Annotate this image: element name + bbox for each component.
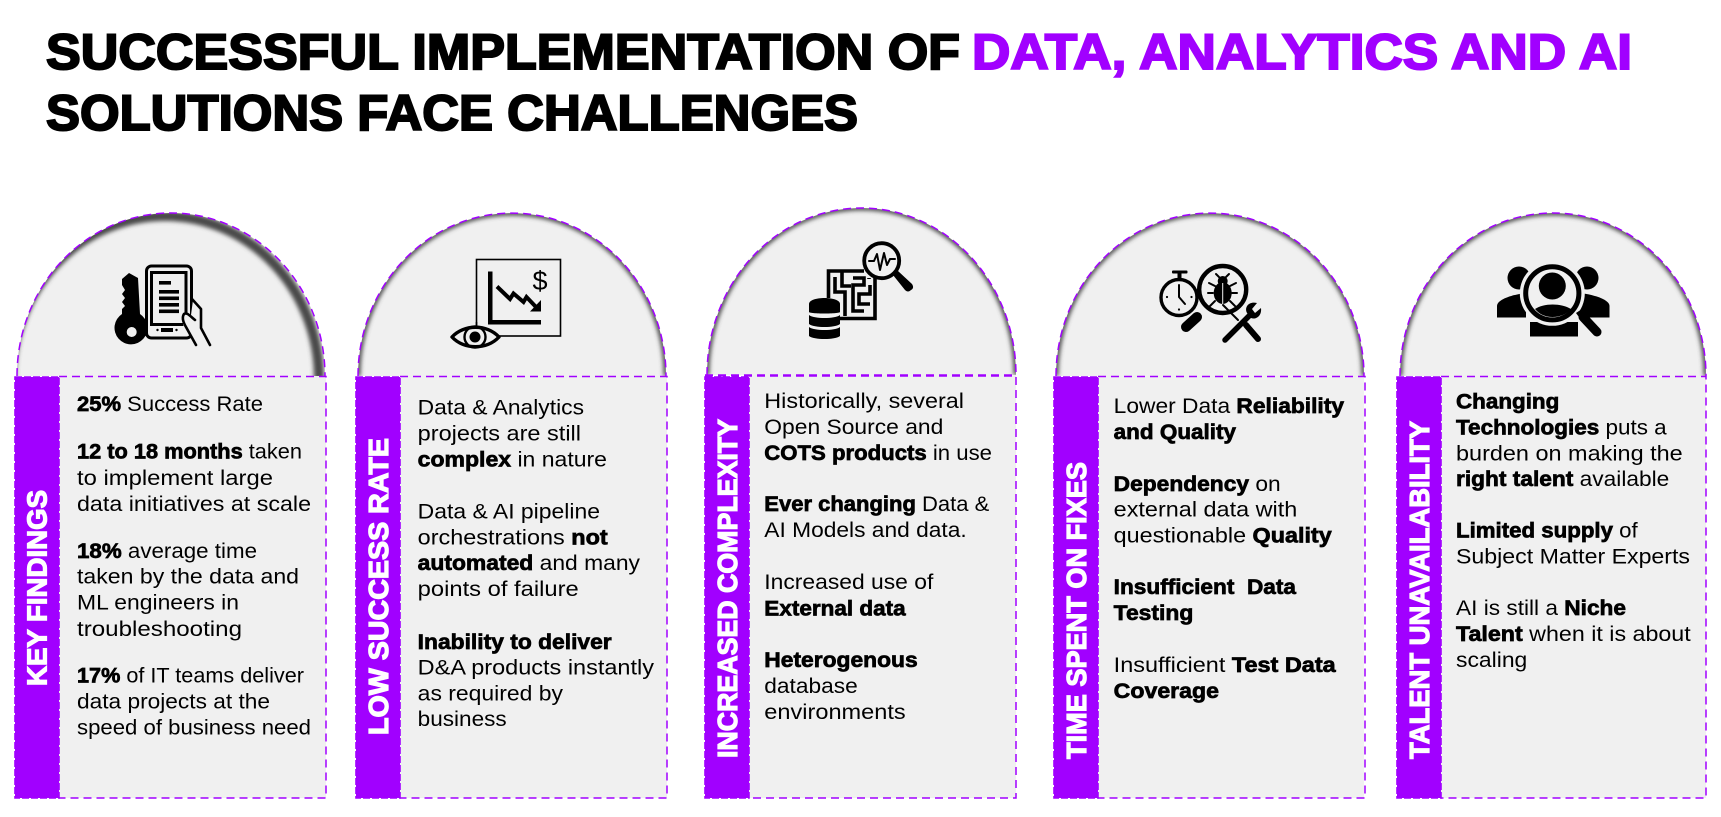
text: low success rate: points of failure bbox=[418, 577, 579, 601]
border: talent unavailability bbox=[1441, 376, 1706, 798]
border: low success rate bbox=[400, 376, 667, 798]
text: talent unavailability: right talent available bbox=[1456, 467, 1669, 491]
text: time spent on fixes: Insufficient Data bbox=[1114, 575, 1297, 599]
panel: key findings bbox=[11, 213, 326, 798]
text: increased complexity: Ever changing Data & bbox=[764, 492, 989, 516]
panel: talent unavailability bbox=[1397, 213, 1706, 798]
panel: time spent on fixes bbox=[1054, 213, 1365, 798]
dome: increased complexity bbox=[707, 208, 1016, 375]
side bar: increased complexity bbox=[705, 377, 749, 798]
text: key findings bbox=[77, 392, 311, 740]
text: increased complexity: Open Source and bbox=[764, 415, 943, 439]
side bar: increased complexity: INCREASED COMPLEXITY bbox=[712, 419, 743, 758]
text: increased complexity bbox=[764, 389, 992, 724]
text: increased complexity: Historically, several bbox=[764, 389, 964, 413]
text: key findings: troubleshooting bbox=[77, 617, 242, 641]
title: SUCCESSFUL IMPLEMENTATION OF bbox=[46, 24, 960, 80]
text: talent unavailability: Technologies puts a bbox=[1456, 416, 1667, 440]
text: time spent on fixes: questionable Quality bbox=[1114, 524, 1332, 548]
side bar: low success rate: LOW SUCCESS RATE bbox=[363, 438, 394, 735]
text: key findings: 17% of IT teams deliver bbox=[77, 664, 304, 688]
text: key findings: to implement large bbox=[77, 466, 273, 490]
border: key findings bbox=[59, 376, 326, 798]
dome: low success rate bbox=[358, 213, 666, 376]
dome: talent unavailability bbox=[1400, 213, 1706, 376]
panel: low success rate bbox=[356, 213, 667, 798]
text: talent unavailability: AI is still a Niche bbox=[1456, 596, 1626, 620]
text: time spent on fixes: Testing bbox=[1114, 601, 1193, 625]
text: low success rate: Data & Analytics bbox=[418, 396, 584, 420]
side bar: talent unavailability: TALENT UNAVAILABILITY bbox=[1404, 421, 1435, 759]
text: increased complexity: AI Models and data. bbox=[764, 518, 967, 542]
text: time spent on fixes: Lower Data Reliability bbox=[1114, 394, 1344, 418]
text: key findings: data initiatives at scale bbox=[77, 492, 311, 516]
text: increased complexity: Heterogenous bbox=[764, 648, 918, 672]
text: time spent on fixes: Insufficient Test Data bbox=[1114, 653, 1337, 677]
text: key findings: taken by the data and bbox=[77, 564, 299, 588]
text: time spent on fixes: and Quality bbox=[1114, 420, 1236, 444]
title: SOLUTIONS FACE CHALLENGES bbox=[46, 85, 858, 141]
icon: stopwatch, bug magnifier and tools bbox=[1161, 266, 1261, 340]
side bar: low success rate bbox=[356, 377, 400, 798]
side bar: time spent on fixes bbox=[1054, 377, 1098, 798]
text: low success rate: D&A products instantly bbox=[418, 656, 654, 680]
icon: falling dollar chart and eye bbox=[452, 260, 560, 348]
text: key findings: speed of business need bbox=[77, 716, 311, 740]
text: low success rate: as required by bbox=[418, 682, 563, 706]
text: talent unavailability: Limited supply of bbox=[1456, 518, 1638, 542]
body: time spent on fixes bbox=[1098, 376, 1364, 798]
text: low success rate: Data & AI pipeline bbox=[418, 500, 600, 524]
side bar: key findings bbox=[15, 377, 59, 798]
text: talent unavailability: Subject Matter Experts bbox=[1456, 544, 1690, 568]
text: low success rate: projects are still bbox=[418, 422, 581, 446]
border: time spent on fixes bbox=[1098, 376, 1365, 798]
title bbox=[46, 24, 1632, 141]
body: talent unavailability bbox=[1441, 376, 1706, 798]
border: increased complexity bbox=[705, 375, 1016, 798]
side bar: talent unavailability bbox=[1397, 377, 1441, 798]
text: low success rate: automated and many bbox=[418, 551, 640, 575]
body: key findings bbox=[59, 376, 326, 798]
text: low success rate bbox=[418, 396, 654, 731]
text: low success rate: Inability to deliver bbox=[418, 630, 612, 654]
text: talent unavailability: Talent when it is about bbox=[1456, 622, 1691, 646]
text: key findings: 25% Success Rate bbox=[77, 392, 263, 416]
dome: time spent on fixes bbox=[1056, 213, 1364, 376]
text: increased complexity: COTS products in use bbox=[764, 441, 992, 465]
text: talent unavailability: Changing bbox=[1456, 390, 1559, 414]
title: DATA, ANALYTICS AND AI bbox=[972, 24, 1632, 80]
text: key findings: 12 to 18 months taken bbox=[77, 440, 302, 464]
text: increased complexity: Increased use of bbox=[764, 570, 933, 594]
side bar: time spent on fixes: TIME SPENT ON FIXES bbox=[1061, 462, 1092, 759]
text: key findings: 18% average time bbox=[77, 539, 257, 563]
text: talent unavailability bbox=[1456, 390, 1691, 672]
text: low success rate: business bbox=[418, 707, 507, 731]
text: low success rate: complex in nature bbox=[418, 448, 607, 472]
body: low success rate bbox=[400, 376, 667, 798]
text: time spent on fixes: Dependency on bbox=[1114, 472, 1281, 496]
icon: people under magnifier bbox=[1497, 261, 1610, 336]
side bar: key findings: KEY FINDINGS bbox=[22, 490, 52, 686]
panel: increased complexity bbox=[705, 208, 1016, 798]
icon: key and tablet in hand bbox=[114, 266, 210, 345]
text: talent unavailability: scaling bbox=[1456, 648, 1527, 672]
text: increased complexity: environments bbox=[764, 700, 906, 724]
text: low success rate: orchestrations not bbox=[418, 526, 608, 550]
text: increased complexity: database bbox=[764, 674, 858, 698]
text: increased complexity: External data bbox=[764, 596, 907, 620]
icon: database, maze and magnifier bbox=[809, 243, 913, 339]
text: talent unavailability: burden on making the bbox=[1456, 442, 1683, 466]
dome: key findings bbox=[11, 213, 325, 379]
body: increased complexity bbox=[749, 375, 1016, 798]
text: key findings: data projects at the bbox=[77, 690, 270, 714]
icon: falling dollar chart and eye: $ bbox=[532, 266, 548, 296]
text: time spent on fixes: Coverage bbox=[1114, 679, 1219, 703]
text: key findings: ML engineers in bbox=[77, 590, 239, 614]
text: time spent on fixes: external data with bbox=[1114, 498, 1297, 522]
text: time spent on fixes bbox=[1114, 394, 1344, 703]
